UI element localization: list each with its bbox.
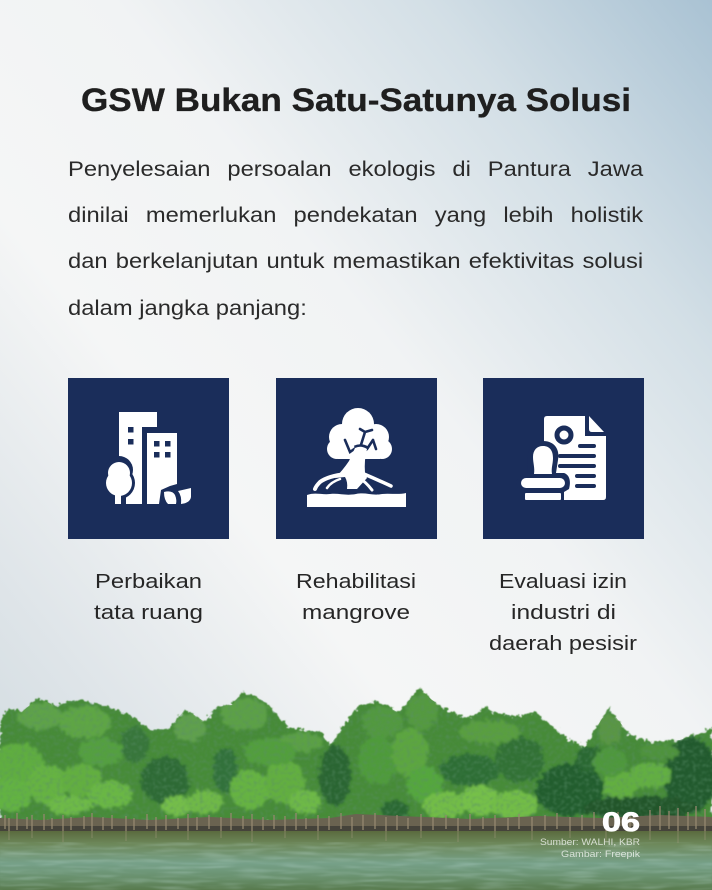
source credit <box>540 837 640 860</box>
caption: tata ruang <box>94 570 203 624</box>
caption: izin industri <box>489 570 637 655</box>
icon: city buildings <box>103 412 191 504</box>
water <box>0 831 712 890</box>
airy upper crowns <box>18 702 62 730</box>
panel: tata ruang <box>68 378 229 539</box>
tree canopy <box>0 688 712 822</box>
bright sunlit crowns <box>0 743 44 787</box>
page number: 06 <box>602 807 640 837</box>
source credit: Sumber: WALHI, KBR <box>540 837 640 848</box>
panel: izin industri <box>483 378 644 539</box>
caption: tata ruang: tata ruang <box>94 601 203 624</box>
source credit: Gambar: Freepik <box>561 849 640 860</box>
shadows <box>141 756 189 804</box>
intro paragraph: dan berkelanjutan untuk memastikan efektivitas solusi <box>68 250 643 273</box>
icon: mangrove tree <box>307 408 406 507</box>
intro paragraph: dinilai memerlukan pendekatan yang lebih holistik <box>68 204 643 227</box>
caption: izin industri: industri di <box>511 601 616 624</box>
caption: izin industri: Evaluasi izin <box>499 570 627 593</box>
intro paragraph <box>68 158 644 320</box>
icon: document and stamp <box>516 416 606 503</box>
intro paragraph: Penyelesaian persoalan ekologis di Pantura Jawa <box>68 158 643 181</box>
panel: mangrove <box>276 378 437 539</box>
caption: mangrove: mangrove <box>302 601 410 624</box>
caption: mangrove: Rehabilitasi <box>296 570 416 593</box>
intro paragraph: dalam jangka panjang: <box>68 297 307 320</box>
caption: tata ruang: Perbaikan <box>95 570 202 593</box>
muddy shoreline <box>0 806 712 832</box>
title: GSW Bukan Satu-Satunya Solusi <box>81 82 631 118</box>
caption: izin industri: daerah pesisir <box>489 632 637 655</box>
caption: mangrove <box>296 570 416 624</box>
